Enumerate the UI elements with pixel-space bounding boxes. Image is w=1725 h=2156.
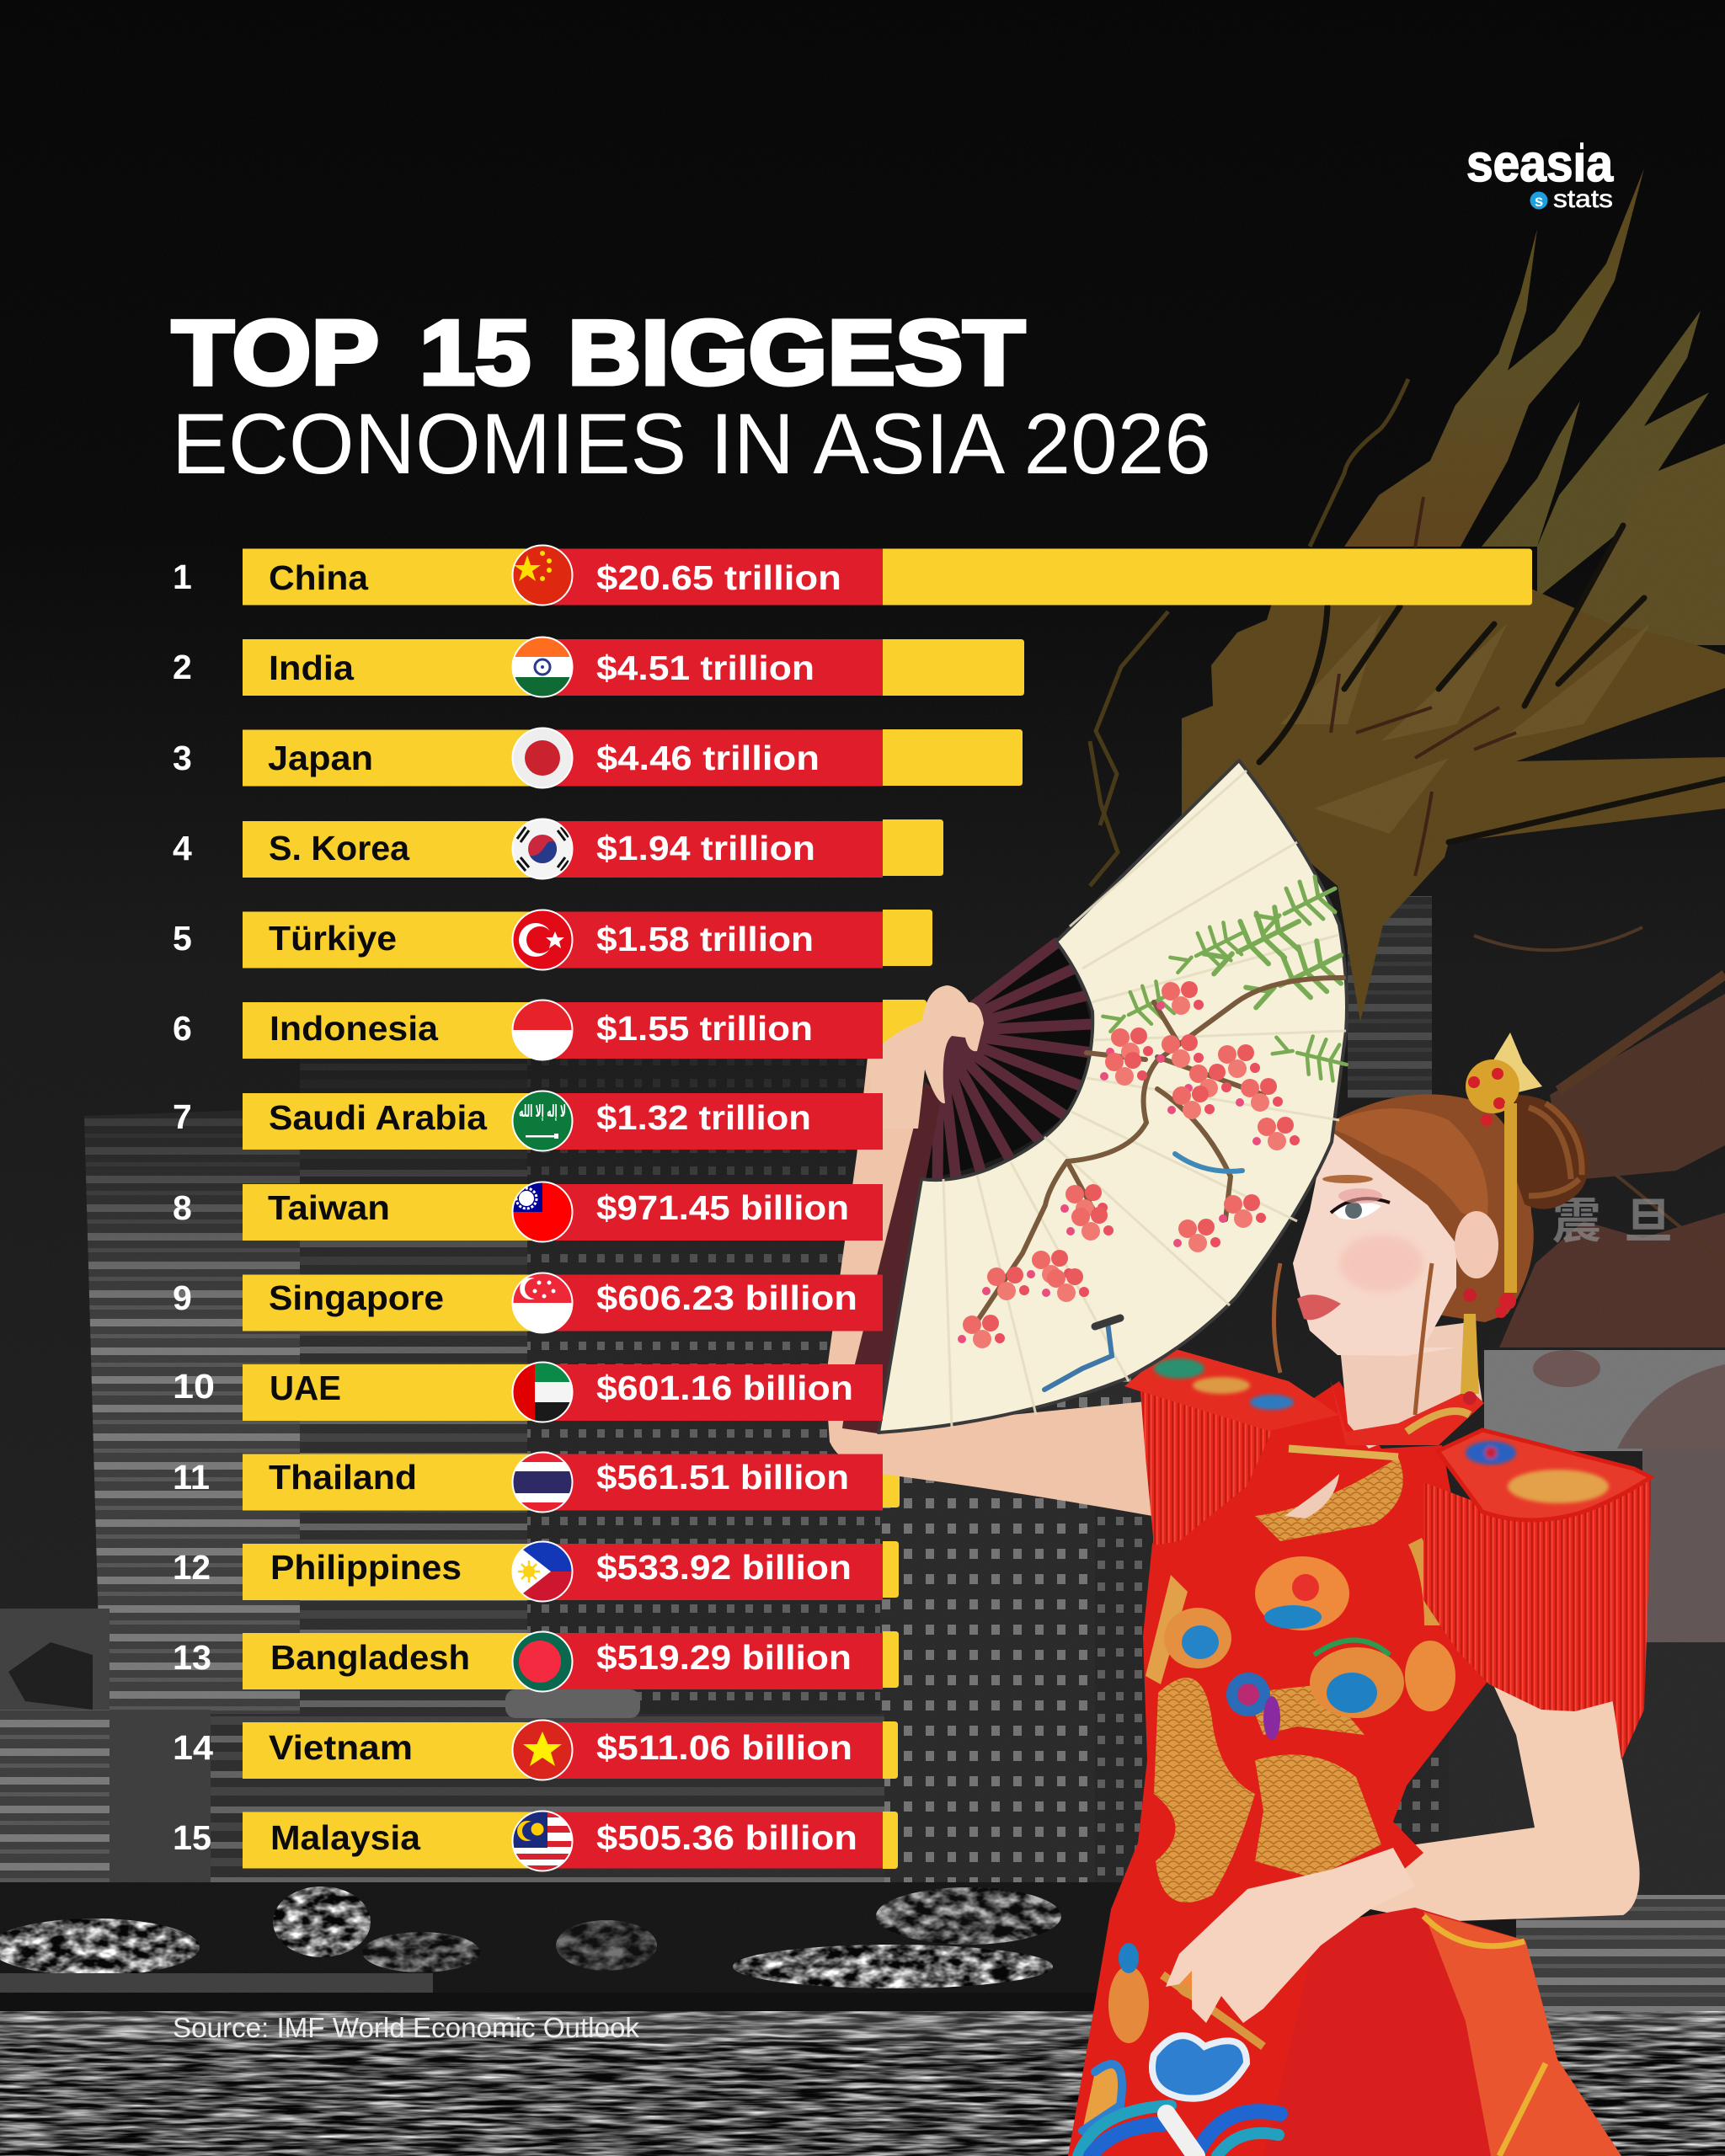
title: BIGGEST: [568, 302, 1025, 404]
lips: [1297, 1294, 1341, 1320]
background: faded shop sign characters: [1552, 1194, 1673, 1249]
row 11: Thailand: $561.51 billion: [596, 1458, 849, 1497]
row 2: India: 2: [173, 648, 192, 686]
lighter strands: [1280, 615, 1651, 834]
row 9: Singapore: 9: [173, 1278, 192, 1317]
row 3: Japan: Japan: [268, 739, 373, 777]
dragon head mass right: [1525, 444, 1725, 706]
flag: South Korea: [512, 819, 573, 879]
row 12: Philippines: [173, 1541, 883, 1602]
flag: Japan: [512, 728, 573, 788]
row 6: Indonesia: [173, 1000, 883, 1060]
background: black and white city skyline: [0, 1053, 1725, 2038]
dress gold dragons and clouds: [1108, 1457, 1455, 2047]
fan handle: [842, 1082, 942, 1433]
row 9: Singapore: [173, 1273, 883, 1333]
row 4: South Korea: S. Korea: [269, 829, 410, 867]
row 1: China: China: [269, 558, 369, 597]
title: TOP: [172, 302, 379, 404]
row 13: Bangladesh: $519.29 billion: [596, 1638, 852, 1677]
row 9: Singapore: $606.23 billion: [596, 1278, 857, 1317]
flame tongue main: [1344, 168, 1644, 547]
row 6: Indonesia: Indonesia: [270, 1009, 439, 1048]
face: [1293, 1128, 1457, 1356]
flag: Indonesia: [512, 1000, 573, 1060]
flag: UAE: [512, 1362, 573, 1422]
row 14: Vietnam: Vietnam: [269, 1728, 413, 1767]
hair highlight over forehead: [1327, 1108, 1488, 1221]
cheek blush: [1339, 1235, 1423, 1292]
flag: Thailand: [512, 1452, 573, 1513]
row 2: India: $4.51 trillion: [596, 648, 814, 687]
fan painting: blossoms: [958, 981, 1300, 1348]
row 12: Philippines: Philippines: [270, 1548, 462, 1587]
row 6: Indonesia: 6: [173, 1009, 192, 1048]
resting hand: [1166, 1848, 1415, 2023]
row 4: South Korea: 4: [173, 829, 192, 867]
holding hand: [868, 985, 984, 1129]
title: ECONOMIES IN ASIA 2026: [172, 396, 1211, 492]
row 15: Malaysia: [173, 1811, 883, 1871]
row 7: Saudi Arabia: Saudi Arabia: [269, 1098, 488, 1137]
flag: Singapore: [512, 1273, 573, 1333]
collar: [1330, 1379, 1484, 1445]
background: pale building behind the shoulder: [1484, 1350, 1725, 1642]
flag: Vietnam: [512, 1720, 573, 1780]
row 7: Saudi Arabia: 7: [173, 1097, 192, 1136]
row 8: Taiwan: $971.45 billion: [596, 1188, 849, 1227]
row 1: China: [173, 545, 883, 606]
row 13: Bangladesh: Bangladesh: [270, 1638, 470, 1677]
neck: [1339, 1322, 1482, 1449]
earring: [1461, 1289, 1479, 1405]
left shoulder cape: [1124, 1348, 1339, 1432]
dress body: [1068, 1381, 1487, 2156]
row 10: UAE: [173, 1362, 883, 1422]
hair strands: [1274, 1263, 1432, 1415]
shadow behind fan spokes: [921, 942, 1092, 1179]
yellow sash: [1423, 1916, 1546, 2156]
background: golden dragon illustration: [1090, 168, 1725, 1022]
row 8: Taiwan: [173, 1182, 883, 1242]
flag: Türkiye: [512, 910, 573, 970]
row 9: Singapore: Singapore: [269, 1278, 444, 1317]
title: [172, 302, 1211, 492]
fan painting: branch: [977, 978, 1343, 1321]
background: faded shop sign characters: 震: [1552, 1194, 1601, 1249]
cape pattern left: [1154, 1358, 1294, 1410]
row 15: Malaysia: $505.36 billion: [596, 1818, 857, 1857]
row 1: China: $20.65 trillion: [596, 558, 841, 597]
right cape: [1438, 1430, 1651, 1520]
row 10: UAE: 10: [173, 1367, 215, 1406]
flag: Saudi Arabia: [512, 1091, 573, 1151]
logo: seasia stats: s: [1535, 193, 1543, 211]
left fringe: [1140, 1391, 1272, 1545]
row 1: China: 1: [173, 558, 192, 596]
row 3: Japan: 3: [173, 739, 192, 777]
logo: seasia stats: stats: [1553, 185, 1613, 213]
flag: Philippines: [512, 1541, 573, 1602]
row 14: Vietnam: $511.06 billion: [596, 1728, 852, 1767]
background: riverside trees: [0, 1882, 1516, 2011]
cape pattern right: [1466, 1441, 1609, 1503]
skirt: [1247, 1908, 1621, 2156]
flag: Malaysia: [512, 1811, 573, 1871]
row 5: Türkiye: [173, 910, 883, 970]
ear: [1455, 1211, 1498, 1278]
source note: Source: IMF World Economic Outlook: [173, 2012, 639, 2043]
lower arm: [1370, 1676, 1640, 1922]
gold tassel: [1495, 1103, 1517, 1318]
row 13: Bangladesh: 13: [173, 1638, 211, 1677]
dark gaps and linework: [1259, 526, 1725, 842]
row 12: Philippines: 12: [173, 1548, 211, 1587]
row 11: Thailand: 11: [173, 1458, 210, 1497]
collar gold pattern: [1407, 1412, 1470, 1432]
title: 15: [419, 302, 531, 404]
hair back: [1327, 1094, 1534, 1322]
hem embroidery waves: [1078, 2036, 1280, 2156]
tulle overlay: [1423, 1912, 1621, 2156]
row 14: Vietnam: 14: [173, 1728, 213, 1767]
flag: India: [512, 637, 573, 697]
flame tongue right: [1537, 311, 1709, 598]
background: faded shop sign characters: 旦: [1624, 1194, 1673, 1249]
raised arm: [825, 1057, 1179, 1516]
background: river water: [0, 2011, 1725, 2156]
flag: Saudi Arabia: لا إله إلا الله: [519, 1101, 566, 1121]
eye: [1322, 1175, 1390, 1219]
row 14: Vietnam: [173, 1720, 883, 1780]
fan paper: [879, 760, 1347, 1433]
row 4: South Korea: $1.94 trillion: [596, 829, 815, 867]
row 7: Saudi Arabia: [173, 1091, 883, 1151]
row 2: India: [173, 637, 883, 697]
golden hair ornament: [1466, 1033, 1542, 1126]
braided bun: [1508, 1095, 1589, 1209]
row 6: Indonesia: $1.55 trillion: [596, 1009, 813, 1048]
fan spokes: [937, 943, 1092, 1182]
flame tongue middle: [1482, 401, 1580, 547]
right fringe: [1423, 1477, 1651, 1760]
row 4: South Korea: [173, 819, 883, 879]
row 2: India: India: [269, 648, 355, 687]
keyhole and knot: [1284, 1449, 1398, 1518]
row 12: Philippines: $533.92 billion: [596, 1548, 852, 1587]
row 8: Taiwan: Taiwan: [268, 1188, 390, 1227]
row 5: Türkiye: 5: [173, 919, 192, 958]
whiskers: [1090, 379, 1408, 886]
row 11: Thailand: [173, 1452, 883, 1513]
logo: seasia stats: [1466, 135, 1613, 213]
row 3: Japan: $4.46 trillion: [596, 739, 820, 777]
bar tails: yellow ends scaled to GDP: [883, 549, 1532, 1869]
row 15: Malaysia: Malaysia: [270, 1818, 421, 1857]
row 10: UAE: UAE: [270, 1369, 341, 1407]
row 5: Türkiye: Türkiye: [269, 919, 397, 958]
row 13: Bangladesh: [173, 1631, 883, 1692]
row 11: Thailand: Thailand: [269, 1458, 417, 1497]
flag: China: [512, 545, 573, 606]
fan painting: leaves: [1103, 877, 1354, 1095]
background: fade of skyline into dark top: [0, 985, 1725, 1322]
dragon lower mass: [1182, 590, 1725, 1022]
row 15: Malaysia: 15: [173, 1818, 211, 1857]
row 8: Taiwan: 8: [173, 1188, 192, 1227]
woman in red cheongsam: [825, 760, 1651, 2156]
row 3: Japan: [173, 728, 883, 788]
bun braid highlights: [1529, 1103, 1582, 1196]
background: red dragon wing illustration: [1474, 927, 1725, 1449]
row 5: Türkiye: $1.58 trillion: [596, 920, 814, 958]
row 7: Saudi Arabia: $1.32 trillion: [596, 1098, 811, 1137]
flag: Bangladesh: [512, 1631, 573, 1692]
logo: seasia stats: seasia: [1466, 135, 1613, 193]
row 10: UAE: $601.16 billion: [596, 1369, 853, 1407]
fan painting: birds: [1044, 1154, 1242, 1390]
background: ghost tower behind the fan: [1348, 896, 1432, 1098]
flag: Taiwan: [512, 1182, 573, 1242]
fan folds: [943, 771, 1346, 1428]
